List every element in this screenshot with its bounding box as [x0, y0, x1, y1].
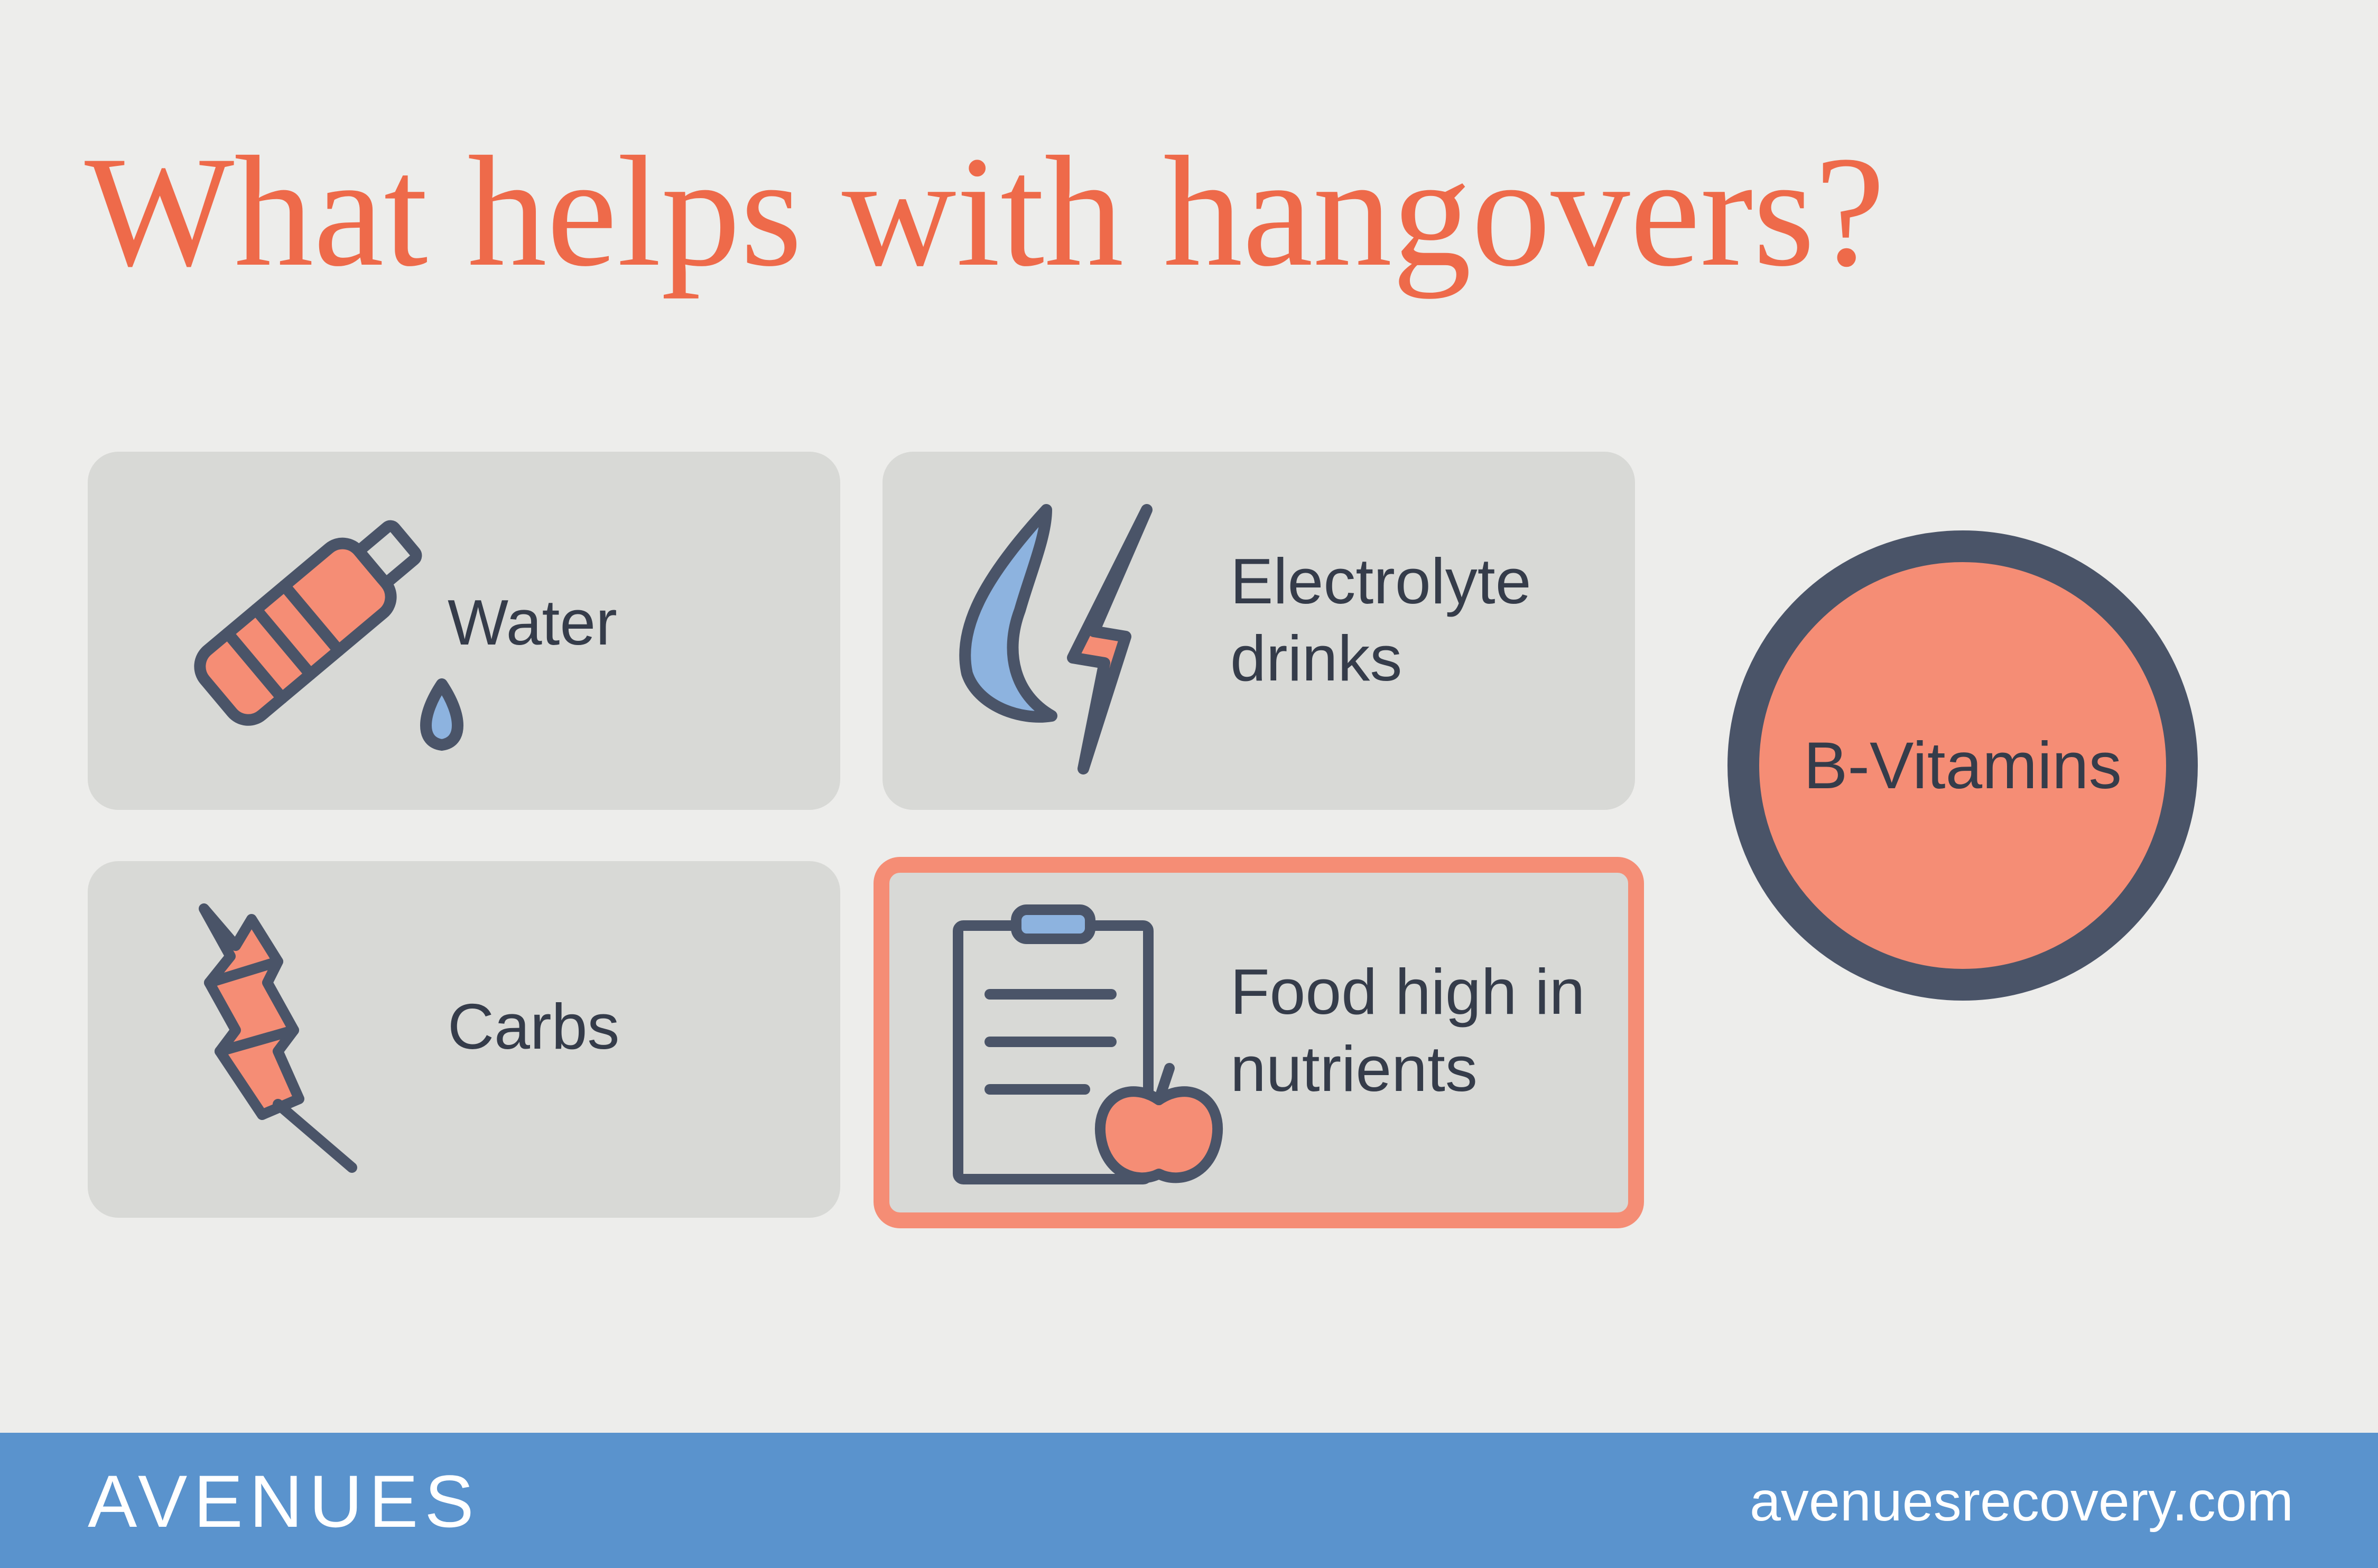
label: electrolyte drinks: drinks [1230, 622, 1402, 694]
footer bar [0, 1433, 2378, 1568]
label: carbs: Carbs [448, 991, 619, 1062]
label: electrolyte drinks: Electrolyte [1230, 545, 1531, 617]
icon: drop and lightning [959, 504, 1153, 774]
label: food high in nutrients: Food high in [1230, 956, 1585, 1028]
icon: water bottle [194, 520, 463, 751]
label: food high in nutrients: nutrients [1230, 1033, 1478, 1105]
panel: water [88, 452, 840, 810]
panel: electrolyte drinks [883, 452, 1635, 810]
url: avenuesrecovery.com [1750, 1470, 2293, 1533]
icon: clipboard with apple [953, 904, 1223, 1184]
title: What helps with hangovers? [85, 124, 1885, 299]
panel: food high in nutrients (highlighted) [874, 857, 1644, 1228]
label: electrolyte drinks [1230, 545, 1531, 694]
label: food high in nutrients [1230, 956, 1585, 1105]
circle: B-Vitamins [1727, 530, 2198, 1001]
icon: wheat [199, 903, 357, 1173]
logo: AVENUES: AVENUES [88, 1460, 480, 1543]
label: water: Water [448, 586, 617, 658]
panel: carbs [88, 861, 840, 1218]
circle: B-Vitamins: B-Vitamins [1804, 729, 2122, 802]
